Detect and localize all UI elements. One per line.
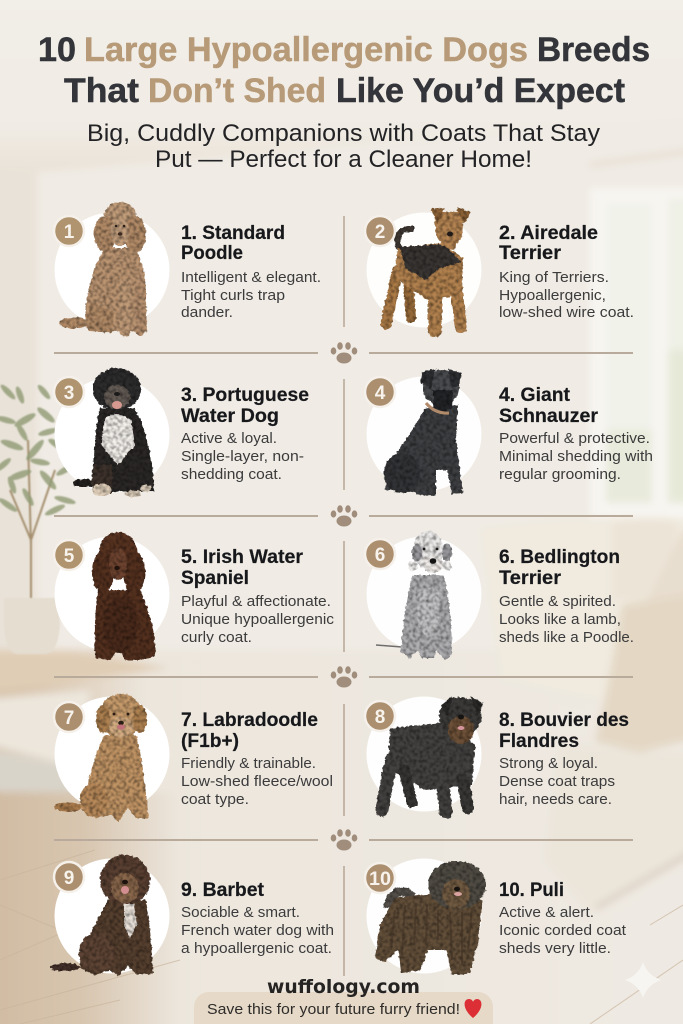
text: Irish Water Spaniel: 5. Irish Water (181, 547, 304, 568)
title: That (64, 72, 139, 110)
text: Bouvier des Flandres: hair, needs care. (499, 792, 612, 808)
footer pill: Save this for your future furry friend! (207, 1001, 460, 1018)
text: Labradoodle: Low-shed fleece/wool (181, 774, 333, 790)
badge 10: 10 (369, 869, 391, 890)
text: Standard Poodle: Poodle (181, 243, 243, 264)
badge 5 (54, 540, 84, 570)
sofa (480, 517, 683, 700)
text: Giant Schnauzer: Powerful & protective. (499, 431, 650, 447)
text: Irish Water Spaniel: Spaniel (181, 568, 249, 589)
text: Bedlington Terrier: sheds like a Poodle. (499, 630, 634, 646)
dog: portuguese water dog (73, 368, 154, 498)
text: Bedlington Terrier: 6. Bedlington (499, 547, 620, 568)
badge 6 (365, 539, 395, 569)
text: Puli: Iconic corded coat (499, 923, 626, 939)
badge 8 (365, 701, 395, 731)
icon: paw 2 (331, 505, 357, 526)
text: Portuguese Water Dog: shedding coat. (181, 467, 282, 483)
dog: airedale (386, 207, 471, 330)
rug right (545, 745, 683, 912)
dog: irish water spaniel (92, 532, 155, 660)
badge 2 (365, 216, 395, 246)
badge 7 (54, 702, 84, 732)
dog: barbet (50, 855, 153, 976)
panel: 8 Bouvier des Flandres (365, 696, 629, 812)
title: Like You’d Expect (336, 72, 625, 110)
text: Airedale Terrier: King of Terriers. (499, 270, 609, 286)
floor (0, 650, 683, 1024)
text: Labradoodle: (F1b+) (181, 731, 239, 752)
footer pill (194, 992, 493, 1024)
dog: labradoodle (54, 694, 148, 822)
text: Giant Schnauzer: Minimal shedding with (499, 449, 653, 465)
panel: 3 Portuguese Water Dog (54, 368, 309, 498)
title (38, 31, 650, 110)
badge 4: 4 (375, 383, 386, 404)
panel: 1 Standard Poodle (54, 202, 321, 333)
text: Airedale Terrier: Terrier (499, 243, 562, 264)
text: Airedale Terrier: Hypoallergenic, (499, 288, 606, 304)
text: Airedale Terrier: 2. Airedale (499, 223, 598, 244)
title: Large Hypoallergenic Dogs (84, 31, 528, 69)
badge 10 (365, 863, 395, 893)
sparkle (625, 962, 661, 998)
text: Bouvier des Flandres (499, 710, 629, 808)
icon: paw 4 (331, 829, 357, 850)
dog: giant schnauzer (384, 369, 463, 496)
subtitle (87, 120, 600, 173)
text: Bouvier des Flandres: Strong & loyal. (499, 756, 598, 772)
badge 3 (54, 377, 84, 407)
title: Don’t Shed (148, 72, 326, 110)
text: Standard Poodle (181, 223, 321, 321)
text: Barbet: 9. Barbet (181, 880, 265, 901)
text: Portuguese Water Dog: 3. Portuguese (181, 385, 309, 406)
text: Portuguese Water Dog (181, 385, 309, 483)
text: Giant Schnauzer: Schnauzer (499, 406, 599, 427)
text: Barbet (181, 880, 334, 957)
text: Standard Poodle: dander. (181, 305, 233, 321)
icon: paw 1 (331, 342, 357, 364)
text: Irish Water Spaniel: Playful & affectionate. (181, 594, 331, 610)
text: Puli (499, 880, 626, 957)
text: Puli: sheds very little. (499, 941, 611, 957)
title: 10 (38, 31, 76, 69)
text: Airedale Terrier: low-shed wire coat. (499, 305, 634, 321)
text: Giant Schnauzer (499, 385, 653, 483)
plant in pot (0, 383, 76, 654)
icon: paw 3 (331, 666, 357, 688)
dog: poodle (59, 202, 147, 333)
text: Labradoodle (181, 710, 333, 808)
text: Standard Poodle: 1. Standard (181, 223, 285, 244)
badge 8: 8 (375, 707, 385, 728)
text: Irish Water Spaniel: Unique hypoallergenic (181, 612, 334, 628)
text: Portuguese Water Dog: Active & loyal. (181, 431, 277, 447)
text: Bedlington Terrier: Gentle & spirited. (499, 594, 616, 610)
badge 1 (54, 216, 84, 246)
badge 2: 2 (375, 222, 385, 243)
text: Irish Water Spaniel: curly coat. (181, 630, 252, 646)
panel: 6 Bedlington Terrier (365, 531, 634, 660)
badge 9: 9 (64, 868, 74, 889)
badge 6: 6 (375, 545, 385, 566)
subtitle: Put — Perfect for a Cleaner Home! (155, 146, 532, 173)
text: Bedlington Terrier: Looks like a lamb, (499, 612, 621, 628)
window (590, 188, 683, 523)
badge 1: 1 (64, 222, 75, 243)
text: Portuguese Water Dog: Water Dog (181, 406, 279, 427)
text: Labradoodle: Friendly & trainable. (181, 756, 316, 772)
text: Labradoodle: 7. Labradoodle (181, 710, 318, 731)
badge 5: 5 (64, 546, 75, 567)
text: Bedlington Terrier (499, 547, 634, 646)
dog: puli (375, 861, 486, 975)
panel: 4 Giant Schnauzer (365, 369, 653, 496)
text: Bedlington Terrier: Terrier (499, 568, 562, 589)
text: Giant Schnauzer: 4. Giant (499, 385, 571, 406)
badge 9 (54, 862, 84, 892)
panel: 10 Puli (365, 858, 626, 975)
text: Puli: Active & alert. (499, 905, 594, 921)
panel: 7 Labradoodle (54, 694, 333, 822)
icon: heart (465, 999, 481, 1018)
text: Labradoodle: coat type. (181, 792, 249, 808)
throw blanket (595, 590, 683, 752)
text: Standard Poodle: Intelligent & elegant. (181, 270, 321, 286)
dog: bedlington terrier (376, 531, 452, 660)
text: Standard Poodle: Tight curls trap (181, 288, 285, 304)
badge 3: 3 (64, 383, 74, 404)
floor planks (0, 850, 683, 1024)
text: Puli: 10. Puli (499, 880, 564, 901)
title: Breeds (537, 31, 650, 69)
text: Irish Water Spaniel (181, 547, 334, 646)
text: Bouvier des Flandres: Flandres (499, 731, 579, 752)
subtitle: Big, Cuddly Companions with Coats That Stay (87, 120, 600, 147)
text: Barbet: a hypoallergenic coat. (181, 941, 332, 957)
text: Bouvier des Flandres: 8. Bouvier des (499, 710, 629, 731)
panel: 9 Barbet (50, 855, 334, 976)
website label: wuffology.com (267, 976, 420, 998)
text: Portuguese Water Dog: Single-layer, non- (181, 449, 304, 465)
text: Barbet: French water dog with (181, 923, 334, 939)
panel: 5 Irish Water Spaniel (54, 532, 334, 660)
panel: 2 Airedale Terrier (365, 207, 634, 330)
badge 7: 7 (64, 708, 74, 729)
dog: bouvier (382, 696, 483, 812)
text: Barbet: Sociable & smart. (181, 905, 300, 921)
text: Bouvier des Flandres: Dense coat traps (499, 774, 615, 790)
text: Airedale Terrier (499, 223, 634, 321)
text: Giant Schnauzer: regular grooming. (499, 467, 621, 483)
badge 4 (365, 377, 395, 407)
